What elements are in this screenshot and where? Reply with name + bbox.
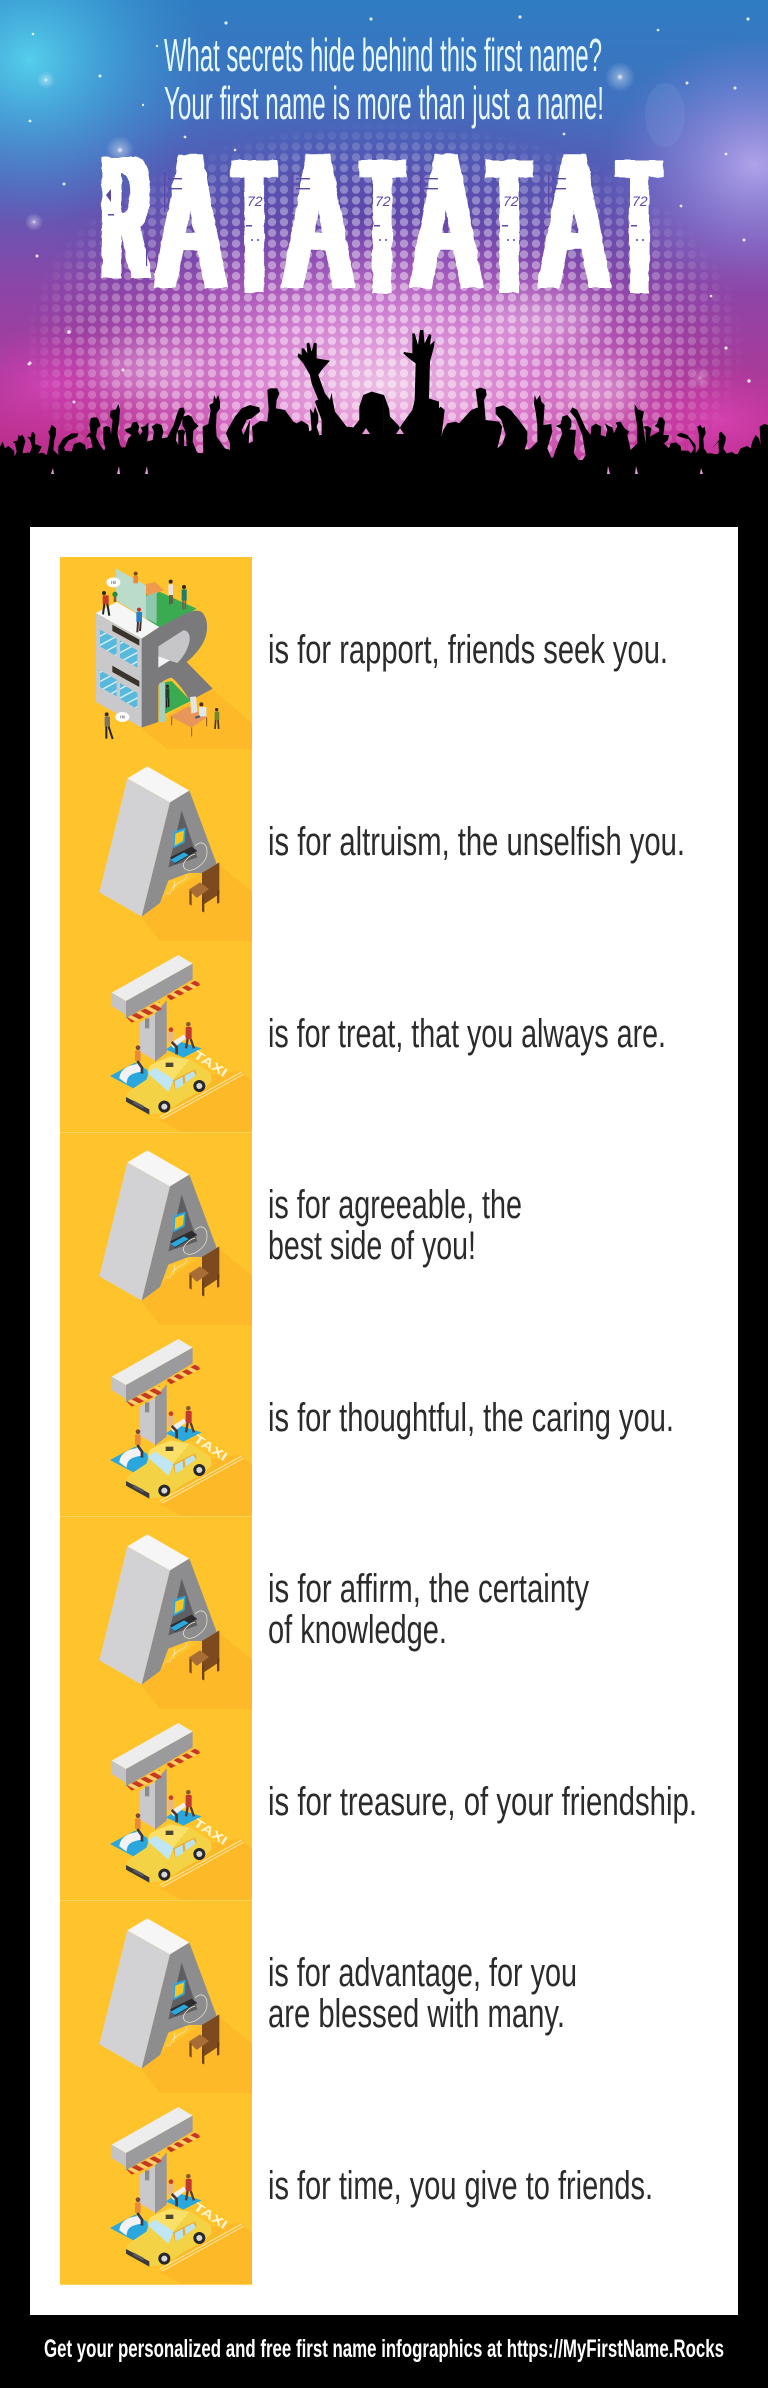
icon: isometric letter A, row 8: [60, 1901, 252, 2093]
title: RATATATAT: 72: [247, 193, 263, 209]
text: A row 8: is for advantage, for you: [268, 1951, 577, 1995]
title: RATATATAT: A: [160, 114, 220, 327]
icon: isometric letter R building: Hi!: [120, 715, 125, 720]
text: A row 6: of knowledge.: [268, 1608, 447, 1652]
title: RATATATAT: T: [364, 120, 401, 332]
icon: isometric letter R building: [60, 557, 252, 749]
icon: isometric letter A, row 6: [60, 1517, 252, 1709]
icon: isometric letter R building: Hi!: [111, 580, 116, 585]
icon: isometric letter A, row 4: [60, 1133, 252, 1325]
title: RATATATAT: T: [491, 120, 528, 332]
title: RATATATAT: 72: [503, 193, 519, 209]
title: RATATATAT: A: [416, 114, 476, 327]
title: RATATATAT: T: [621, 120, 658, 332]
title: RATATATAT: 72: [375, 193, 391, 209]
header: concert stage background: [0, 0, 768, 460]
heading: two tagline lines: [164, 29, 604, 129]
icon: isometric letter A, row 2: [60, 749, 252, 941]
text: A row 6: [268, 1567, 589, 1652]
crowd silhouette: [0, 330, 768, 530]
icon: isometric letter T taxi, row 3: [60, 941, 252, 1133]
icon: isometric letter T taxi, row 9: [60, 2093, 252, 2285]
text: A row 4: is for agreeable, the: [268, 1183, 522, 1227]
panel: white content card: [30, 527, 738, 2315]
text: A row 4: best side of you!: [268, 1224, 476, 1268]
title: RATATATAT: A: [544, 114, 604, 327]
panel: yellow letter column: [60, 557, 252, 2285]
icon: isometric letter T taxi, row 7: [60, 1709, 252, 1901]
text: A row 6: is for affirm, the certainty: [268, 1567, 589, 1611]
text: A row 8: [268, 1951, 577, 2036]
title: RATATATAT: [104, 114, 658, 332]
title: RATATATAT: R: [104, 123, 147, 314]
icon: isometric letter T taxi, row 5: [60, 1325, 252, 1517]
text: A row 4: [268, 1183, 522, 1268]
title: RATATATAT: 72: [632, 193, 648, 209]
title: RATATATAT: A: [288, 114, 348, 327]
title: RATATATAT: T: [236, 120, 273, 332]
text: A row 8: are blessed with many.: [268, 1992, 565, 2036]
